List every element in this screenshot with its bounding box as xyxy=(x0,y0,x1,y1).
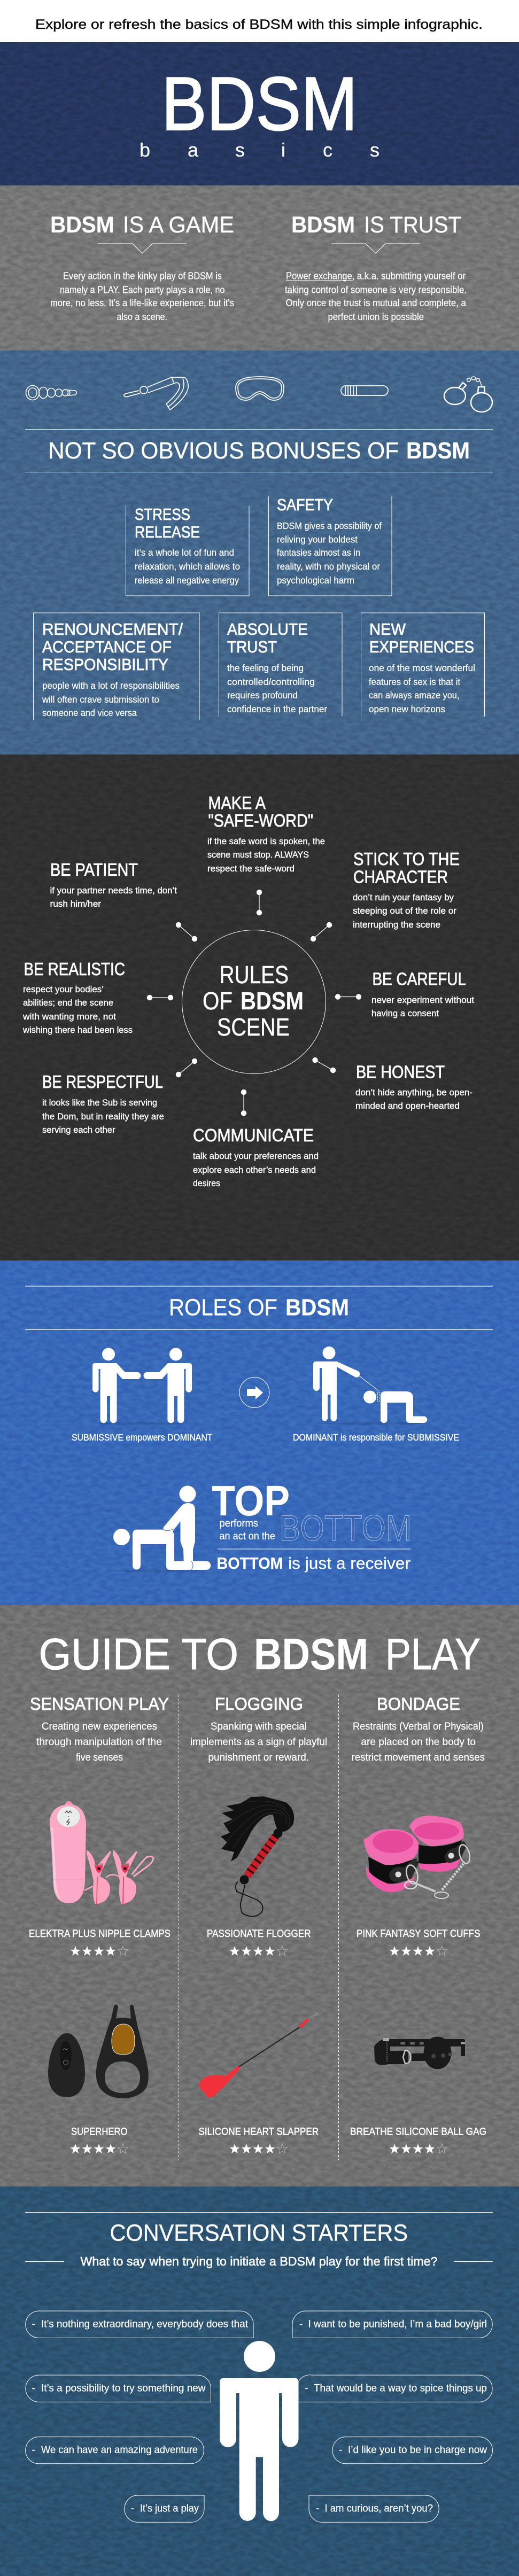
bubble: in charge now: I’d like you to be in charge now xyxy=(348,2444,487,2456)
panel: new experiences: NEW xyxy=(369,620,406,639)
rule: be respectful xyxy=(42,1072,164,1135)
intro sentence: Explore or refresh the basics of BDSM with this simple infographic. xyxy=(35,17,483,32)
text: top performs an act on the bottom: is just a receiver xyxy=(288,1554,410,1573)
icon: blindfold mask xyxy=(236,377,284,400)
product name: elektra plus nipple clamps: ELEKTRA PLUS NIPPLE CLAMPS xyxy=(29,1928,171,1940)
panel: renouncement xyxy=(33,613,199,720)
rule: be realistic: respect your bodies’ xyxy=(23,985,104,994)
bubble: curious: - xyxy=(316,2503,320,2515)
rule: make a safe-word xyxy=(207,793,325,874)
product name: pink fantasy soft cuffs: PINK FANTASY SOFT CUFFS xyxy=(357,1928,480,1940)
title: guide to BDSM play: PLAY xyxy=(385,1629,481,1679)
icon: arrow in circle xyxy=(239,1378,269,1407)
bubble: want to be punished xyxy=(292,2311,492,2338)
bubble: in charge now: - xyxy=(339,2444,342,2456)
heading: BDSM is a game: BDSM xyxy=(50,212,114,238)
column: sensation play: five senses xyxy=(76,1752,123,1763)
rating: ball gag xyxy=(389,2144,447,2153)
panel: renouncement: RENOUNCEMENT/ xyxy=(42,620,183,639)
bubble: just a play xyxy=(125,2495,204,2522)
connectors: rules spokes xyxy=(147,890,361,1116)
text: top performs an act on the bottom: BOTTOM xyxy=(280,1508,412,1548)
icon: submissive hands over to dominant xyxy=(92,1348,192,1425)
panel: stress release: STRESS xyxy=(135,505,190,524)
text: game description: namely a PLAY. Each party plays a role, no xyxy=(60,284,224,295)
heading: not so obvious bonuses: BDSM xyxy=(406,438,470,464)
heading: BDSM is trust xyxy=(291,212,461,238)
rule: communicate: COMMUNICATE xyxy=(193,1125,314,1145)
text: game description: Every action in the kinky play of BDSM is xyxy=(63,270,222,281)
bubble: nothing extraordinary: It’s nothing extraordinary, everybody does that xyxy=(41,2318,249,2330)
panel: new experiences: one of the most wonderful xyxy=(369,663,475,673)
rule: be patient: if your partner needs time, don’t xyxy=(50,886,177,896)
text: top performs an act on the bottom: performs xyxy=(219,1518,258,1529)
panel: renouncement: someone and vice versa xyxy=(42,707,137,718)
title: guide to BDSM play xyxy=(38,1629,481,1679)
panel: BDSM is trust xyxy=(285,212,467,322)
rule: stick to the character: STICK TO THE xyxy=(353,849,460,869)
title: BDSM basics: BDSM xyxy=(161,61,358,146)
column: bondage xyxy=(352,1694,485,1763)
panel: renouncement: ACCEPTANCE OF xyxy=(42,637,172,656)
heading: not so obvious bonuses: NOT SO OBVIOUS BONUSES OF xyxy=(48,438,399,464)
rating: slapper xyxy=(230,2144,288,2153)
panel: absolute trust: confidence in the partner xyxy=(227,704,327,714)
heading: BDSM is a game: IS A GAME xyxy=(123,212,234,238)
column: sensation play: SENSATION PLAY xyxy=(30,1694,169,1714)
bubble: try something new: - xyxy=(32,2382,35,2394)
icon: standing person xyxy=(220,2341,298,2521)
panel: stress release: release all negative energy xyxy=(135,575,239,586)
product name: breathe silicone ball gag: BREATHE SILICONE BALL GAG xyxy=(350,2127,486,2137)
heading: not so obvious bonuses xyxy=(25,430,493,472)
column: flogging: FLOGGING xyxy=(215,1694,303,1714)
rule: communicate xyxy=(193,1125,319,1188)
bubble: just a play: - xyxy=(131,2503,134,2515)
title: guide to BDSM play: GUIDE TO xyxy=(38,1629,238,1679)
text: trust description xyxy=(285,270,467,322)
rule: be honest: don’t hide anything, be open- xyxy=(355,1088,472,1098)
rule: be patient: rush him/her xyxy=(50,899,102,909)
bubble: nothing extraordinary: - xyxy=(32,2318,35,2330)
column: flogging: punishment or reward. xyxy=(208,1752,309,1763)
rule: be realistic: abilities; end the scene xyxy=(23,998,113,1008)
rule: be respectful: the Dom, but in reality they are xyxy=(42,1112,164,1122)
bubble: try something new xyxy=(26,2375,211,2402)
product name: superhero: SUPERHERO xyxy=(71,2127,127,2137)
rule: be realistic xyxy=(22,959,133,1035)
rule: stick to the character: steeping out of the role or xyxy=(353,906,457,916)
column: sensation play: through manipulation of the xyxy=(36,1736,162,1748)
heading: BDSM is trust: IS TRUST xyxy=(364,212,461,238)
rule: be honest: BE HONEST xyxy=(356,1062,445,1081)
panel: renouncement: RESPONSIBILITY xyxy=(42,655,168,674)
panel: new experiences: EXPERIENCES xyxy=(369,637,474,656)
rating: superhero xyxy=(71,2144,128,2153)
icon: handcuffs xyxy=(444,377,492,412)
title: guide to BDSM play: BDSM xyxy=(254,1629,368,1679)
icon: top and bottom figures xyxy=(113,1485,211,1572)
bubble: want to be punished: - xyxy=(299,2318,303,2330)
heading: BDSM is trust: BDSM xyxy=(291,212,355,238)
subheading: what to say: What to say when trying to initiate a BDSM play for the first time? xyxy=(80,2254,437,2268)
panel: stress release: relaxation, which allows to xyxy=(135,561,240,572)
column: sensation play: Creating new experiences xyxy=(42,1721,157,1732)
bubble: nothing extraordinary xyxy=(26,2311,253,2338)
title: BDSM basics: basics xyxy=(140,139,379,161)
rule: be careful: having a consent xyxy=(371,1009,439,1018)
product image: superhero xyxy=(48,2005,149,2098)
heading: roles of BDSM xyxy=(25,1286,493,1329)
panel: absolute trust: requires profound xyxy=(227,690,298,701)
product name: passionate flogger: PASSIONATE FLOGGER xyxy=(207,1928,311,1940)
rule: make a safe-word: "SAFE-WORD" xyxy=(208,811,313,830)
icon: dominant with kneeling submissive on leash xyxy=(313,1347,427,1425)
text: trust description: perfect union is possible xyxy=(328,311,424,322)
bubble: amazing adventure xyxy=(26,2437,204,2464)
rule: make a safe-word: respect the safe-word xyxy=(207,864,295,874)
icon: riding crop xyxy=(124,377,188,410)
rating: flogger xyxy=(230,1946,288,1956)
rule: be careful: never experiment without xyxy=(371,995,474,1005)
panel: safety xyxy=(268,495,392,596)
text: game description: more, no less. It's a life-like experience, but it's xyxy=(50,297,234,308)
panel: renouncement: will often crave submission to xyxy=(42,694,159,705)
text: top performs an act on the bottom: an act on the xyxy=(219,1531,275,1542)
bubble: spice things up: That would be a way to spice things up xyxy=(314,2382,487,2394)
panel: stress release: it’s a whole lot of fun and xyxy=(135,547,234,558)
circle: rules of BDSM scene xyxy=(182,930,326,1074)
column: bondage: are placed on the body to xyxy=(361,1736,476,1748)
heading: BDSM is a game xyxy=(50,212,234,238)
column: flogging xyxy=(190,1694,327,1763)
rule: make a safe-word: if the safe word is spoken, the xyxy=(207,837,325,846)
rule: make a safe-word: scene must stop. ALWAYS xyxy=(207,850,309,860)
bubble: just a play: It’s just a play xyxy=(140,2503,199,2515)
text: trust description: Only once the trust is mutual and complete, a xyxy=(285,297,467,308)
product name: silicone heart slapper: SILICONE HEART SLAPPER xyxy=(199,2127,319,2137)
text: game description xyxy=(50,270,234,322)
panel: new experiences: can always amaze you, xyxy=(369,690,460,701)
rule: be patient: BE PATIENT xyxy=(50,860,138,880)
text: trust description: taking control of someone is very responsible. xyxy=(285,284,467,295)
column: sensation play xyxy=(30,1694,169,1763)
panel: BDSM is a game xyxy=(50,212,234,322)
rule: communicate: desires xyxy=(193,1179,220,1188)
column: bondage: restrict movement and senses xyxy=(352,1752,485,1763)
panel: new experiences xyxy=(361,613,484,717)
panel: safety: reliving your boldest xyxy=(277,534,358,545)
heading: roles of BDSM: BDSM xyxy=(285,1294,349,1321)
panel: absolute trust xyxy=(219,613,342,717)
panel: safety: psychological harm xyxy=(277,575,354,586)
rule: be honest xyxy=(355,1062,472,1111)
column: flogging: implements as a sign of playful xyxy=(190,1736,327,1748)
rule: stick to the character xyxy=(353,849,460,930)
circle: rules of BDSM scene: OF xyxy=(203,987,233,1015)
column: bondage: BONDAGE xyxy=(377,1694,460,1714)
circle: rules of BDSM scene: BDSM xyxy=(241,987,304,1015)
panel: new experiences: features of sex is that it xyxy=(369,676,460,687)
bubble: in charge now xyxy=(332,2437,492,2464)
rule: be careful xyxy=(371,969,474,1018)
panel: renouncement: people with a lot of responsibilities xyxy=(42,680,180,691)
panel: absolute trust: the feeling of being xyxy=(227,663,304,673)
text: game description: also a scene. xyxy=(117,311,167,322)
bubble: spice things up: - xyxy=(305,2382,308,2394)
circle: rules of BDSM scene: RULES xyxy=(219,961,289,989)
text: trust description: Power exchange, a.k.a. submitting yourself or xyxy=(286,270,466,281)
rule: communicate: talk about your preferences and xyxy=(193,1151,319,1161)
rule: be realistic: BE REALISTIC xyxy=(24,959,125,979)
caption: dominant is responsible: DOMINANT is responsible for SUBMISSIVE xyxy=(293,1432,459,1443)
bubble: curious xyxy=(309,2495,439,2522)
rule: stick to the character: interrupting the scene xyxy=(353,920,440,930)
rating: cuffs xyxy=(389,1946,447,1956)
panel: safety: BDSM gives a possibility of xyxy=(277,520,382,531)
panel: safety: SAFETY xyxy=(277,495,333,514)
product image: flogger xyxy=(221,1796,294,1917)
panel: stress release: RELEASE xyxy=(135,523,200,541)
rule: stick to the character: CHARACTER xyxy=(353,867,448,887)
bubble: amazing adventure: We can have an amazing adventure xyxy=(41,2444,198,2456)
bubble: try something new: It’s a possibility to try something new xyxy=(41,2382,206,2394)
heading: conversation starters: CONVERSATION STARTERS xyxy=(110,2220,408,2246)
bubble: spice things up xyxy=(297,2375,492,2402)
column: flogging: Spanking with special xyxy=(211,1721,307,1732)
product image: nipple clamps xyxy=(50,1801,153,1904)
rule: be careful: BE CAREFUL xyxy=(372,969,466,989)
panel: safety: fantasies almost as in xyxy=(277,547,360,558)
column: bondage: Restraints (Verbal or Physical) xyxy=(353,1721,484,1732)
rating: elektra xyxy=(71,1946,128,1956)
icon: anal beads xyxy=(26,386,77,400)
panel: safety: reality, with no physical or xyxy=(277,561,380,572)
text: top performs an act on the bottom: TOP xyxy=(212,1477,290,1524)
heading: roles of BDSM: ROLES OF xyxy=(169,1294,277,1321)
panel: absolute trust: controlled/controlling xyxy=(227,676,315,687)
rule: be patient xyxy=(50,860,177,909)
rule: communicate: explore each other’s needs and xyxy=(193,1165,316,1175)
rule: be realistic: wishing there had been less xyxy=(22,1025,133,1035)
panel: stress release xyxy=(126,505,249,596)
panel: absolute trust: TRUST xyxy=(227,637,277,656)
circle: rules of BDSM scene: SCENE xyxy=(217,1013,290,1041)
rule: be respectful: serving each other xyxy=(42,1125,115,1135)
rule: be honest: minded and open-hearted xyxy=(355,1101,460,1111)
bubble: amazing adventure: - xyxy=(32,2444,35,2456)
text: top performs an act on the bottom xyxy=(212,1477,412,1573)
rule: be realistic: with wanting more, not xyxy=(22,1012,116,1022)
panel: absolute trust: ABSOLUTE xyxy=(227,620,308,639)
bubble: want to be punished: I want to be punished, I’m a bad boy/girl xyxy=(308,2318,487,2330)
icon: vibrator xyxy=(341,386,388,395)
product image: ball gag xyxy=(374,2037,465,2069)
rule: be respectful: it looks like the Sub is serving xyxy=(42,1098,157,1108)
panel: new experiences: open new horizons xyxy=(369,704,445,714)
product image: soft cuffs xyxy=(363,1816,471,1898)
bubble: curious: I am curious, aren’t you? xyxy=(325,2503,433,2515)
product image: heart slapper xyxy=(199,2013,317,2098)
rule: make a safe-word: MAKE A xyxy=(208,793,266,813)
rule: be respectful: BE RESPECTFUL xyxy=(42,1072,163,1092)
caption: submissive empowers dominant: SUBMISSIVE empowers DOMINANT xyxy=(72,1432,213,1443)
rule: stick to the character: don’t ruin your fantasy by xyxy=(353,893,454,902)
text: top performs an act on the bottom: BOTTOM xyxy=(217,1554,283,1573)
